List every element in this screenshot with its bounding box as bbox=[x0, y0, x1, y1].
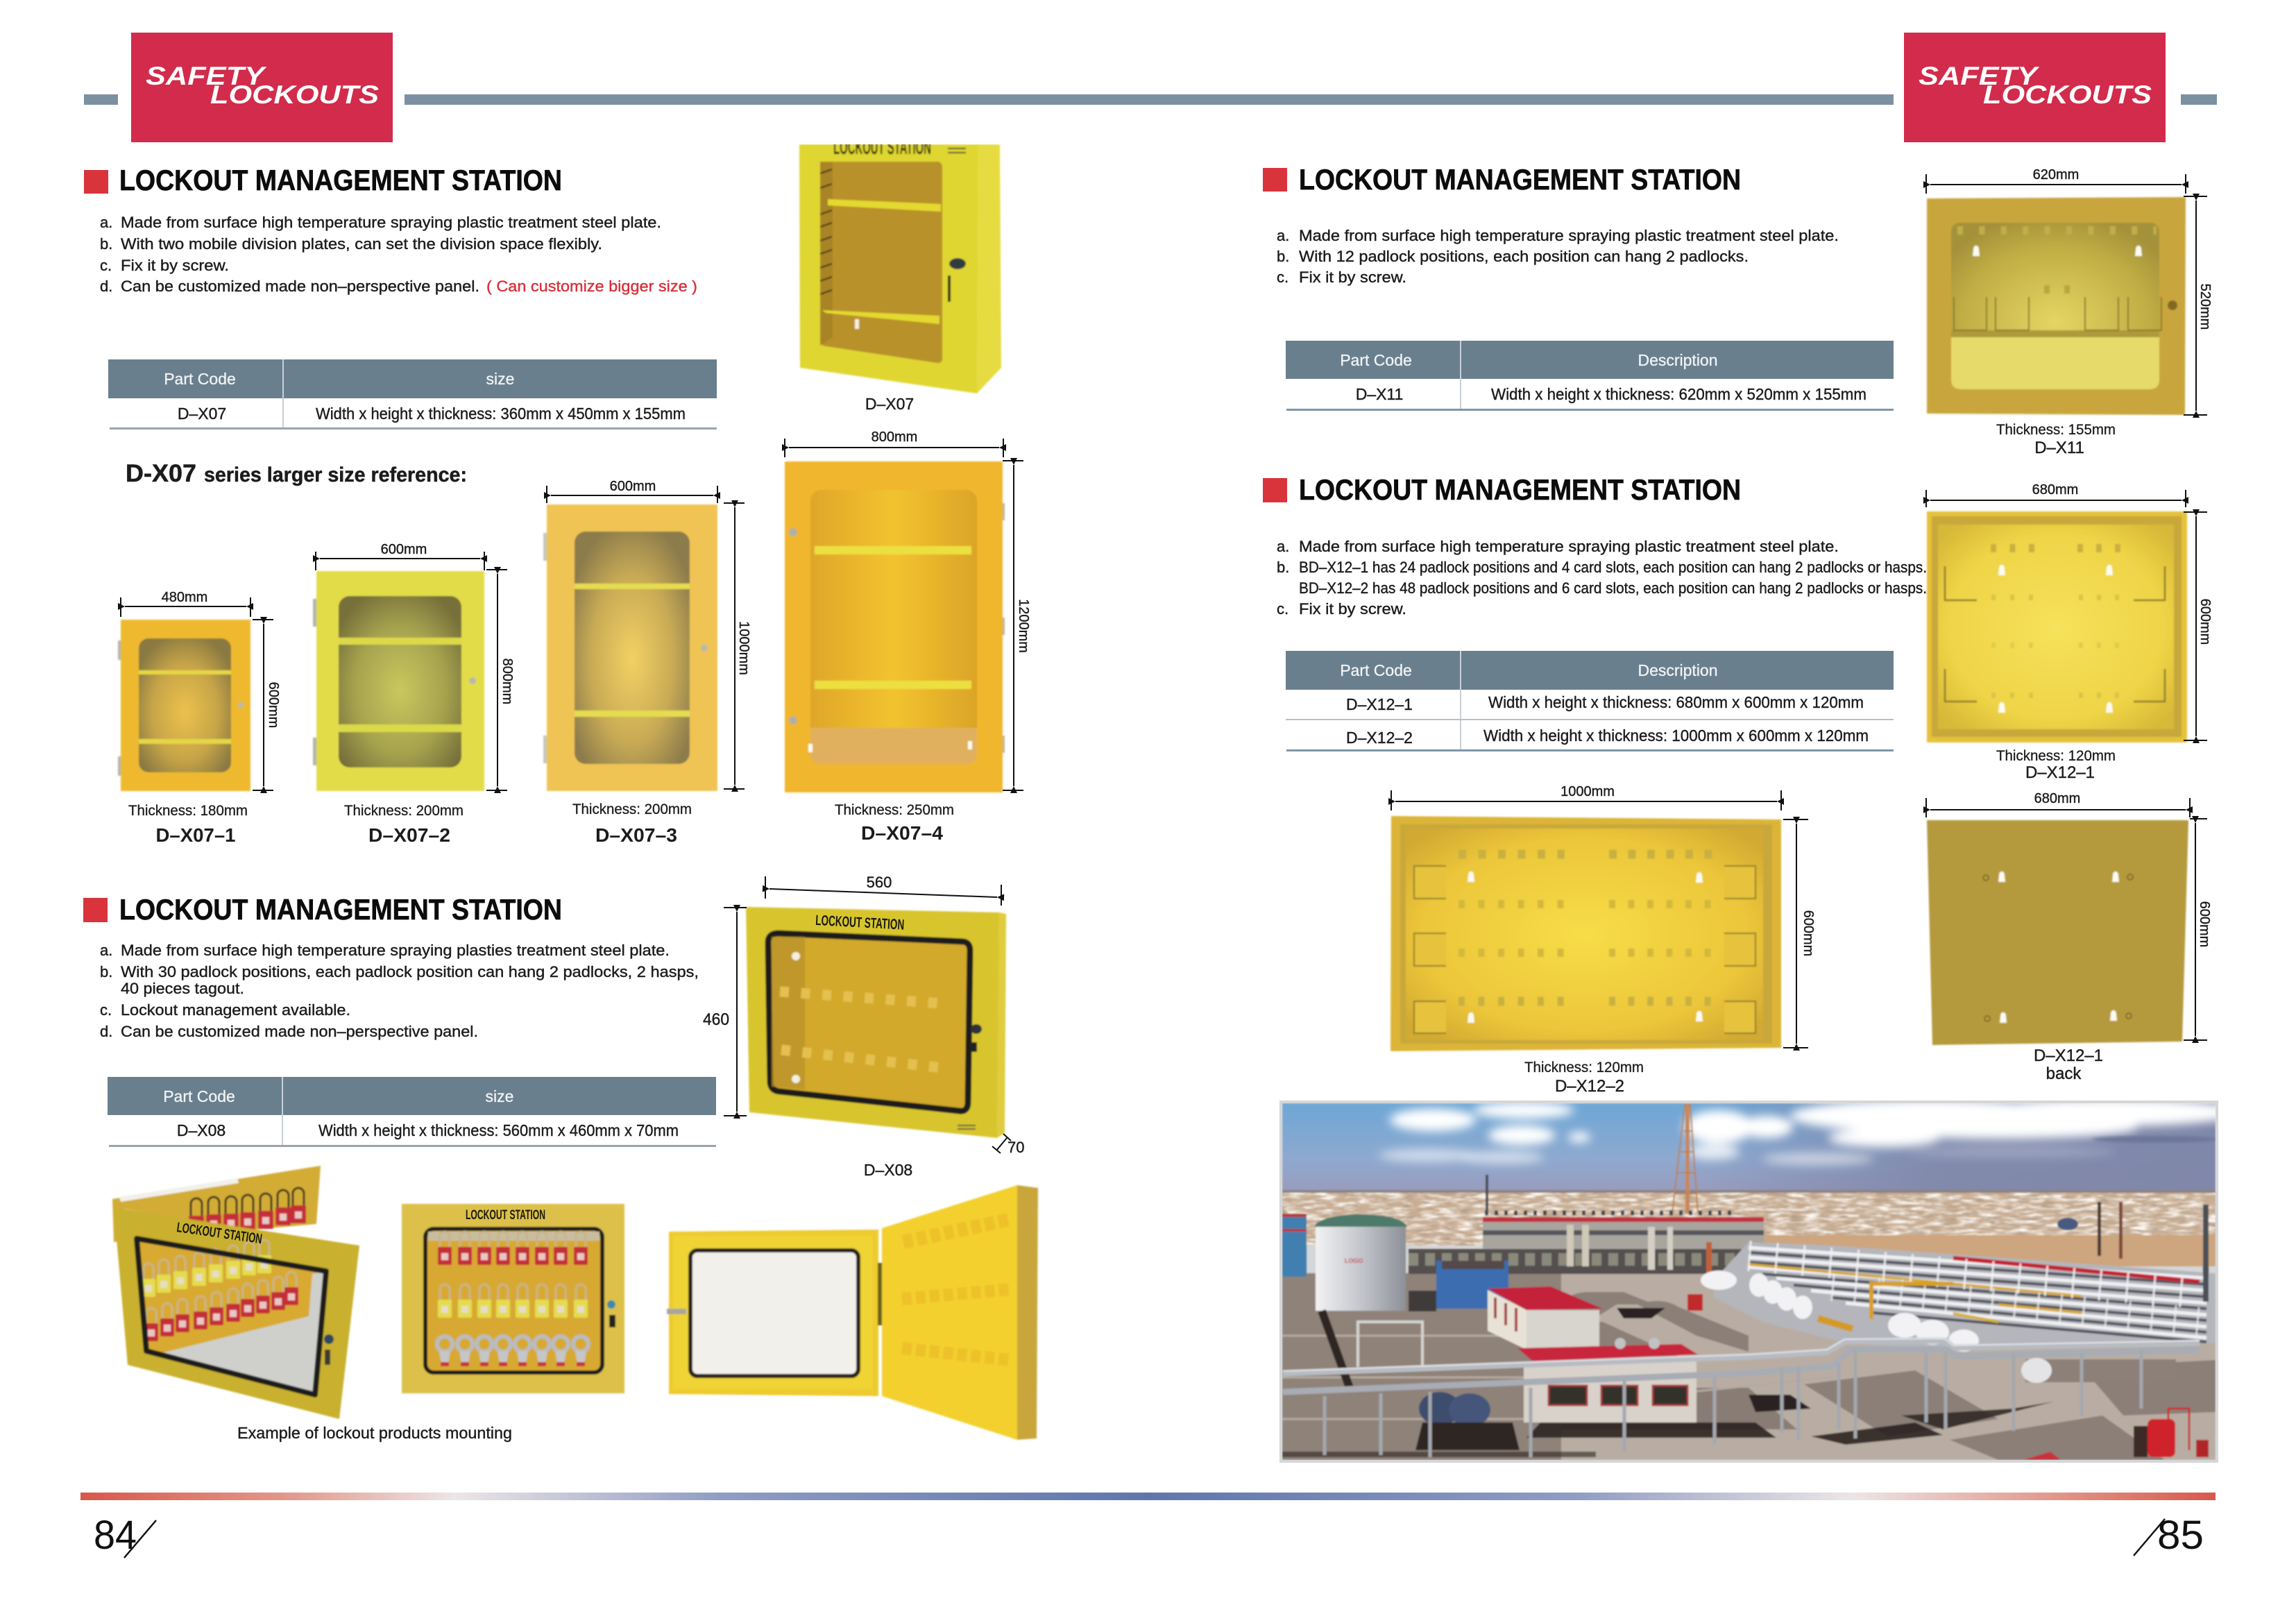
product: D-X07-1: Thickness: 180mm bbox=[128, 803, 248, 819]
spec table: D-X12: Width x height x thickness: 1000mm x 600mm x 120mm bbox=[1483, 726, 1869, 745]
product: D-X11: Thickness: 155mm bbox=[1996, 422, 2116, 438]
mounting example: open cabinet bbox=[667, 1185, 1038, 1440]
dimensions: D-X12-2: 600mm bbox=[1801, 910, 1816, 956]
dimensions: D-X07-4 bbox=[785, 430, 1031, 790]
spec table: D-X12: Description bbox=[1638, 661, 1718, 679]
elevated tank bbox=[2057, 1218, 2078, 1230]
feature list: D-X08: d. bbox=[100, 1023, 112, 1040]
label: D-X07-1: D–X07–1 bbox=[155, 824, 236, 846]
dimensions: D-X07-1: 600mm bbox=[266, 682, 281, 728]
feature list: D-X08: c. bbox=[100, 1001, 112, 1019]
long building bbox=[1409, 1213, 1764, 1274]
feature list: D-X08: Made from surface high temperature spraying plasties treatment steel plate. bbox=[121, 942, 670, 959]
feature list: D-X12: c. bbox=[1277, 600, 1289, 618]
product: D-X07 cabinet: LOCKOUT STATION bbox=[833, 136, 931, 159]
dimensions: D-X07-3: 600mm bbox=[610, 479, 656, 494]
blue pump house bbox=[1409, 1261, 1508, 1311]
feature list: D-X12: Fix it by screw. bbox=[1299, 600, 1406, 618]
spec table: D-X07: Part Code bbox=[164, 370, 236, 388]
caption: mounting example: Example of lockout products mounting bbox=[237, 1424, 512, 1442]
red fire equipment bbox=[1687, 1294, 2209, 1460]
dark spheres bbox=[1415, 1392, 1520, 1450]
spec table: D-X08: D–X08 bbox=[177, 1121, 226, 1139]
feature list: D-X07: Made from surface high temperature spraying plastic treatment steel plate. bbox=[121, 214, 661, 231]
product: D-X08 cabinet: LOCKOUT STATION bbox=[815, 912, 905, 933]
feature list: D-X07: With two mobile division plates, can set the division space flexibly. bbox=[121, 235, 602, 253]
dimensions: D-X11 bbox=[1926, 167, 2213, 415]
concrete yard bbox=[1282, 1273, 1561, 1460]
product: D-X12-1 front: Thickness: 120mm bbox=[1996, 748, 2116, 764]
gradient footer rule bbox=[80, 1493, 2216, 1500]
feature list: D-X11: Made from surface high temperature spraying plastic treatment steel plate. bbox=[1299, 227, 1839, 244]
header bar: left segment bbox=[84, 94, 118, 105]
photo: oil and gas processing plant bbox=[1279, 1098, 2241, 1463]
feature list: D-X12: Made from surface high temperature spraying plastic treatment steel plate. bbox=[1299, 538, 1839, 555]
feature list: D-X08: Can be customized made non–perspective panel. bbox=[121, 1023, 478, 1040]
spec table: D-X12: Width x height x thickness: 680mm x 600mm x 120mm bbox=[1488, 693, 1864, 711]
dimensions: D-X07-3: 1000mm bbox=[736, 621, 751, 675]
feature list: D-X07: ( Can customize bigger size ) bbox=[486, 278, 697, 295]
dimensions: D-X11: 520mm bbox=[2197, 284, 2213, 330]
red roof building rear bbox=[1488, 1286, 1603, 1350]
feature list: D-X07: Can be customized made non–perspective panel. bbox=[121, 278, 479, 295]
feature list: D-X08: b. bbox=[100, 963, 112, 980]
storage tank: LOGO bbox=[1345, 1257, 1363, 1264]
feature list: D-X11: Fix it by screw. bbox=[1299, 269, 1406, 286]
spec table: D-X07: Width x height x thickness: 360mm x 450mm x 155mm bbox=[316, 405, 686, 423]
sub-heading: larger size reference bbox=[126, 460, 467, 487]
product: D-X07-4: Thickness: 250mm bbox=[835, 802, 954, 818]
label: D-X07-4: D–X07–4 bbox=[861, 822, 943, 844]
logo left: safety lockouts: SAFETY bbox=[146, 62, 267, 90]
feature list: D-X12: a. bbox=[1277, 538, 1289, 555]
mounting example: closed with padlocks and hasps: LOCKOUT STATION bbox=[466, 1208, 545, 1223]
feature list: D-X08: With 30 padlock positions, each padlock position can hang 2 padlocks, 2 hasps, bbox=[121, 963, 699, 980]
mounting example: door ajar with padlocks bbox=[112, 1166, 359, 1419]
painted yard lines bbox=[1282, 1334, 1737, 1421]
header bar: right segment bbox=[2181, 94, 2217, 105]
logo right: safety lockouts: SAFETY bbox=[1919, 62, 2040, 90]
dimensions: back: 680mm bbox=[2034, 791, 2080, 806]
product: D-X07-2 bbox=[313, 542, 515, 819]
feature list: D-X07: b. bbox=[100, 235, 112, 253]
spec table: D-X08: Width x height x thickness: 560mm x 460mm x 70mm bbox=[318, 1121, 679, 1139]
feature list: D-X08 bbox=[100, 942, 699, 1040]
dimensions: D-X07-1 bbox=[121, 590, 281, 790]
spec table: D-X08 bbox=[108, 1077, 716, 1147]
yard plots bbox=[1554, 1292, 2216, 1460]
mounting example: closed with padlocks and hasps bbox=[402, 1204, 624, 1393]
dimensions: D-X12-2: 1000mm bbox=[1561, 784, 1615, 799]
dimensions: D-X12-2 bbox=[1391, 784, 1816, 1048]
page number 85 bbox=[2134, 1513, 2204, 1558]
spec table: D-X11: Width x height x thickness: 620mm x 520mm x 155mm bbox=[1491, 385, 1866, 403]
spec table: D-X11: D–X11 bbox=[1356, 385, 1403, 403]
spec table: D-X11: Description bbox=[1638, 351, 1718, 369]
feature list: D-X11: With 12 padlock positions, each position can hang 2 padlocks. bbox=[1299, 248, 1749, 265]
section heading: D-X08 station: LOCKOUT MANAGEMENT STATION bbox=[119, 893, 562, 926]
tower bbox=[1672, 1105, 1698, 1214]
dimensions: D-X12-1 bbox=[1926, 482, 2213, 740]
product: D-X12-1 front: D–X12–1 bbox=[2025, 763, 2095, 782]
spec table: D-X12: Part Code bbox=[1340, 661, 1412, 679]
feature list: D-X11: a. bbox=[1277, 227, 1289, 244]
product: D-X08 cabinet bbox=[703, 874, 1024, 1179]
spec table: D-X07: D–X07 bbox=[178, 405, 226, 423]
feature list: D-X12: BD–X12–2 has 48 padlock positions and 6 card slots, each position can hang 2 padlocks or hasps. bbox=[1299, 579, 1927, 597]
product: D-X07-4 bbox=[785, 430, 1031, 818]
process pipe racks bbox=[1701, 1242, 2216, 1352]
spec table: D-X12: D–X12–2 bbox=[1346, 729, 1413, 747]
feature list: D-X11 bbox=[1277, 227, 1839, 286]
header bar: long centre rule bbox=[405, 94, 1894, 105]
logo left: safety lockouts: LOCKOUTS bbox=[210, 80, 379, 109]
sub-heading: larger size reference: D-X07 bbox=[126, 460, 196, 487]
product: D-X11: D–X11 bbox=[2034, 439, 2084, 457]
logo right: safety lockouts: LOCKOUTS bbox=[1983, 80, 2152, 109]
left blue building bbox=[1282, 1214, 1307, 1277]
page number 84: 84 bbox=[94, 1513, 137, 1558]
feature list: D-X08: 40 pieces tagout. bbox=[121, 980, 244, 997]
logo left: safety lockouts bbox=[131, 33, 393, 142]
product: D-X07-3: Thickness: 200mm bbox=[572, 801, 692, 817]
vent pole bbox=[1486, 1175, 1488, 1214]
dimensions: D-X07-1: 480mm bbox=[162, 590, 207, 605]
feature list: D-X11: b. bbox=[1277, 248, 1289, 265]
desert ground bbox=[1282, 1190, 2216, 1266]
dimensions: D-X08: 460 bbox=[703, 1010, 729, 1029]
section heading: D-X11 station: LOCKOUT MANAGEMENT STATION bbox=[1299, 163, 1741, 196]
mounting example: door ajar with padlocks: LOCKOUT STATION bbox=[176, 1220, 263, 1247]
dimensions: D-X07-4: 1200mm bbox=[1016, 599, 1031, 653]
dimensions: D-X12-1: 680mm bbox=[2032, 482, 2078, 498]
dimensions: back: 600mm bbox=[2197, 901, 2212, 947]
dimensions: D-X07-2: 600mm bbox=[381, 542, 427, 557]
horizontal vessel bbox=[2021, 1358, 2176, 1383]
fenced enclosure bbox=[1358, 1322, 1422, 1367]
spec table: D-X08: Part Code bbox=[163, 1087, 235, 1105]
feature list: D-X12 bbox=[1277, 538, 1927, 618]
dimensions: D-X08: 560 bbox=[867, 874, 892, 891]
logo right: safety lockouts bbox=[1904, 33, 2166, 142]
feature list: D-X11: c. bbox=[1277, 269, 1289, 286]
product: D-X07-1 bbox=[118, 590, 281, 819]
dimensions: D-X11: 620mm bbox=[2033, 167, 2079, 182]
feature list: D-X08: Lockout management available. bbox=[121, 1001, 350, 1019]
product: D-X07-3 bbox=[543, 479, 751, 817]
feature list: D-X07: a. bbox=[100, 214, 112, 231]
product: D-X12-1 back bbox=[1926, 791, 2212, 1083]
foreground pipelines bbox=[1283, 1339, 2200, 1392]
feature list: D-X12: BD–X12–1 has 24 padlock positions and 4 card slots, each position can hang 2 padlocks or hasps. bbox=[1299, 559, 1927, 576]
feature list: D-X12: b. bbox=[1277, 559, 1289, 576]
feature list: D-X07: d. bbox=[100, 278, 112, 295]
sub-heading: larger size reference: series larger size reference: bbox=[204, 464, 467, 486]
feature list: D-X07: c. bbox=[100, 257, 112, 274]
section heading: D-X07 station: LOCKOUT MANAGEMENT STATION bbox=[119, 164, 562, 196]
product: D-X11 bbox=[1926, 167, 2213, 457]
feature list: D-X08: a. bbox=[100, 942, 112, 959]
dimensions: back bbox=[1926, 791, 2212, 1040]
spec table: D-X12: D–X12–1 bbox=[1346, 695, 1413, 713]
spec table: D-X11 bbox=[1286, 341, 1894, 411]
product: D-X12-1 front bbox=[1926, 482, 2213, 782]
shadows on the ground bbox=[1282, 1308, 2054, 1457]
pipe support posts bbox=[1325, 1350, 2141, 1457]
product: D-X12-2 bbox=[1391, 784, 1816, 1096]
product: D-X12-1 back: back bbox=[2046, 1064, 2082, 1083]
dimensions: D-X07-2: 800mm bbox=[500, 658, 515, 704]
page number 85: 85 bbox=[2157, 1513, 2204, 1558]
vent stacks bbox=[2098, 1202, 2101, 1256]
sky bbox=[1282, 1103, 2216, 1191]
product: D-X12-2: D–X12–2 bbox=[1555, 1077, 1624, 1096]
dimensions: D-X08 bbox=[703, 874, 1024, 1156]
dimensions: D-X07-3 bbox=[547, 479, 751, 789]
spec table: D-X07: size bbox=[486, 370, 514, 388]
label: D-X07-3: D–X07–3 bbox=[595, 824, 677, 846]
dimensions: D-X07-2 bbox=[316, 542, 515, 790]
feature list: D-X07 bbox=[100, 214, 697, 295]
red roof building front bbox=[1517, 1338, 1698, 1422]
spec table: D-X12 bbox=[1286, 651, 1894, 751]
product: D-X12-2: Thickness: 120mm bbox=[1524, 1060, 1644, 1076]
label: D-X07-2: D–X07–2 bbox=[368, 824, 450, 846]
section heading: D-X12 station: LOCKOUT MANAGEMENT STATION bbox=[1299, 473, 1741, 506]
product: D-X12-1 back: D–X12–1 bbox=[2034, 1046, 2103, 1065]
feature list: D-X07: Fix it by screw. bbox=[121, 257, 229, 274]
dimensions: D-X12-1: 600mm bbox=[2197, 599, 2213, 645]
spec table: D-X11: Part Code bbox=[1340, 351, 1412, 369]
product: D-X07 cabinet bbox=[799, 136, 1001, 413]
product: D-X07-2: Thickness: 200mm bbox=[344, 803, 464, 819]
dimensions: D-X08: 70 bbox=[1007, 1139, 1024, 1156]
spec table: D-X08: size bbox=[486, 1087, 513, 1105]
spec table: D-X07 bbox=[108, 359, 717, 430]
product: D-X08 cabinet: D–X08 bbox=[864, 1161, 912, 1179]
dimensions: D-X07-4: 800mm bbox=[871, 430, 917, 445]
product: D-X07 cabinet: D–X07 bbox=[865, 395, 914, 413]
storage tank bbox=[1315, 1214, 1406, 1388]
